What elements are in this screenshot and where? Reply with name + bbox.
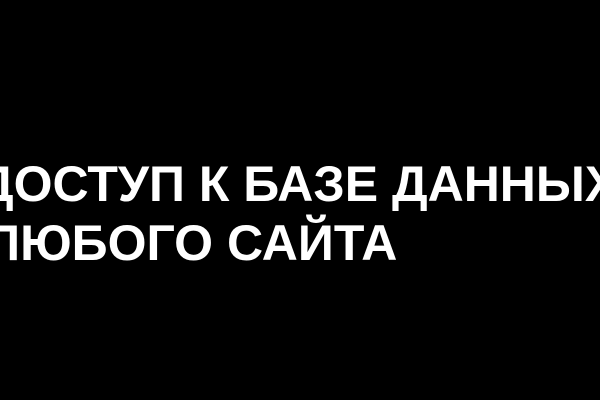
title <box>0 156 600 271</box>
